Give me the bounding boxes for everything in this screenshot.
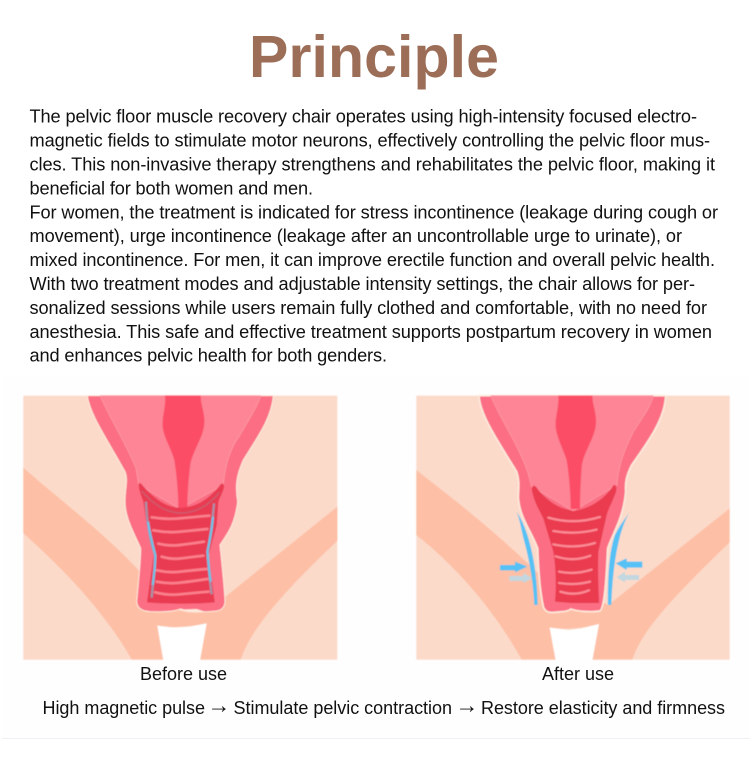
- white gap below the pelvis: [550, 624, 599, 660]
- description text block: The pelvic floor muscle recovery chair operates using high-intensity focused electro-: [30, 107, 697, 127]
- title: Principle: [249, 24, 499, 90]
- description text block: movement), urge incontinence (leakage after an uncontrollable urge to urinate), or: [30, 226, 682, 246]
- process summary line: Restore elasticity and firmness: [481, 698, 725, 718]
- process summary line: Stimulate pelvic contraction: [234, 698, 452, 718]
- description text block: sonalized sessions while users remain fully clothed and comfortable, with no need for: [30, 298, 707, 318]
- illustration: before use: [23, 396, 337, 660]
- caption: after use: After use: [542, 664, 614, 684]
- description text block: anesthesia. This safe and effective treatment supports postpartum recovery in women: [30, 322, 712, 342]
- process summary line: →: [456, 692, 478, 718]
- description text block: magnetic fields to stimulate motor neurons, effectively controlling the pelvic floor mus-: [30, 131, 710, 151]
- process summary line: →: [208, 692, 230, 718]
- description text block: [30, 107, 718, 366]
- comparison panel background: [2, 377, 750, 739]
- process summary line: High magnetic pulse: [42, 698, 205, 718]
- icon: left grey arrow: [509, 573, 532, 583]
- description text block: For women, the treatment is indicated for stress incontinence (leakage during cough or: [30, 202, 718, 222]
- white gap below the pelvis: [157, 623, 207, 660]
- description text block: and enhances pelvic health for both genders.: [30, 346, 387, 366]
- process summary line: [42, 692, 725, 718]
- description text block: beneficial for both women and men.: [30, 178, 313, 198]
- icon: left blue arrow: [500, 562, 527, 572]
- icon: right grey arrow: [617, 572, 639, 582]
- description text block: mixed incontinence. For men, it can improve erectile function and overall pelvic health.: [30, 250, 715, 270]
- icon: right blue arrow: [616, 558, 642, 570]
- description text block: cles. This non-invasive therapy strengthens and rehabilitates the pelvic floor, making it: [30, 154, 715, 174]
- caption: before use: Before use: [140, 664, 227, 684]
- description text block: With two treatment modes and adjustable intensity settings, the chair allows for per-: [30, 274, 695, 294]
- illustration: after use: [416, 396, 730, 660]
